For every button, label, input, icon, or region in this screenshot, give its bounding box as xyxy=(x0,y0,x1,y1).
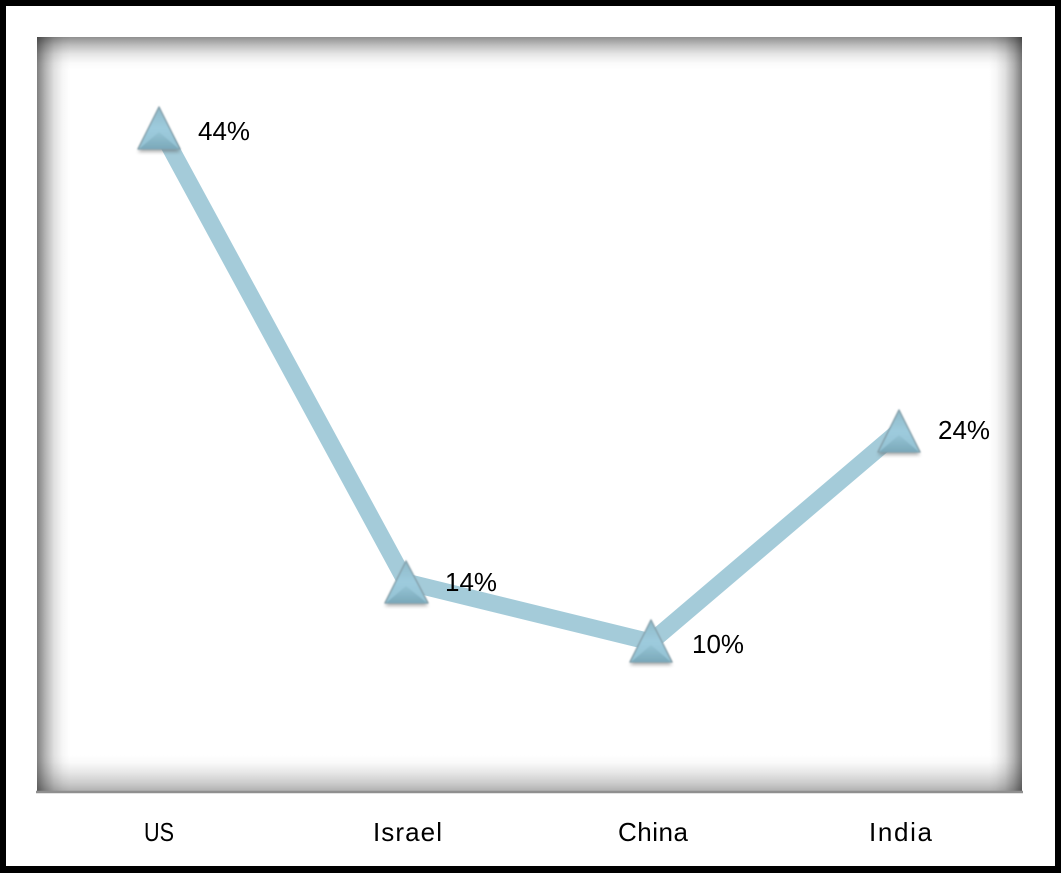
data line xyxy=(159,127,899,642)
value label: Israel 14%: 14% xyxy=(445,567,497,597)
marker: Israel xyxy=(385,561,428,606)
marker: US xyxy=(138,107,180,152)
category label: US: US xyxy=(144,817,174,847)
value label: India 24%: 24% xyxy=(938,415,990,445)
value label: US 44%: 44% xyxy=(198,116,250,146)
category label: Israel: Israel xyxy=(373,817,442,847)
category label: India: India xyxy=(869,817,933,847)
category label: China: China xyxy=(618,817,689,847)
marker: China xyxy=(630,620,672,665)
baseline axis xyxy=(36,791,1023,793)
value label: China 10%: 10% xyxy=(692,629,744,659)
marker: India xyxy=(878,410,920,455)
